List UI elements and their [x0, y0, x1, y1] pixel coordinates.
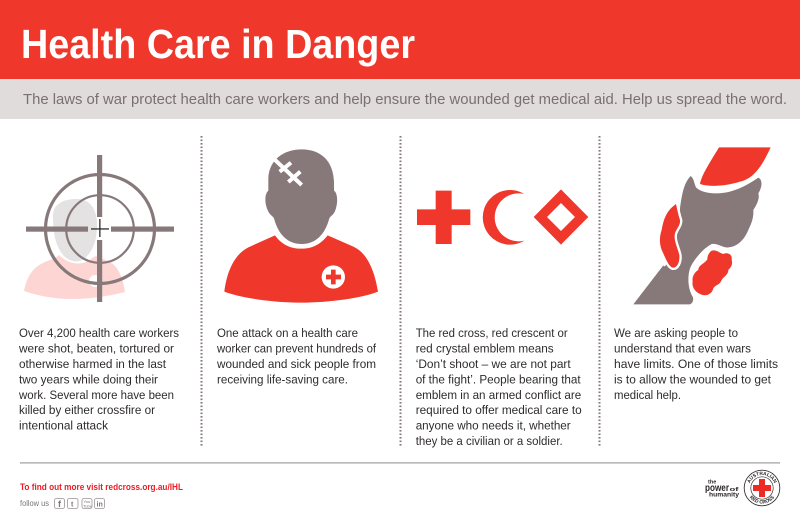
- text: protective emblems: red crystal emblem means: [416, 342, 554, 356]
- icon: red cross: [417, 191, 470, 244]
- logo: the power of humanity: of: [730, 487, 739, 493]
- icon: emblems: [417, 189, 588, 245]
- logo: Australian Red Cross: RED CROSS: [750, 495, 774, 504]
- text: attacks on workers: two years while doing their: [19, 372, 158, 386]
- text: attacks on workers: were shot, beaten, tortured or: [18, 342, 174, 356]
- panel: protective emblems: [416, 189, 588, 448]
- text: limits of war: have limits. One of those limits: [614, 357, 778, 371]
- text: protective emblems: required to offer medical care to: [416, 403, 582, 417]
- footer call to action: To find out more visit redcross.org.au/IHL: [20, 482, 183, 492]
- text: protective emblems: of the fight’. People bearing that: [416, 372, 581, 386]
- text: protective emblems: [416, 326, 582, 448]
- text: protective emblems: they be a civilian or a soldier.: [416, 434, 563, 448]
- text: impact of an attack: receiving life-saving care.: [217, 372, 348, 386]
- icon: red crescent: [483, 190, 524, 245]
- text: protective emblems: ‘Don’t shoot – we are not part: [416, 357, 571, 371]
- text: protective emblems: The red cross, red crescent or: [416, 326, 568, 340]
- social icons: You: [84, 499, 90, 504]
- logo: Australian Red Cross: AUSTRALIAN: [748, 472, 777, 484]
- social icons: f: [58, 499, 62, 509]
- text: protective emblems: anyone who needs it, whether: [416, 418, 571, 432]
- panel: limits of war: [614, 147, 778, 402]
- text: attacks on workers: otherwise harmed in the last: [19, 357, 167, 371]
- text: impact of an attack: One attack on a health care: [217, 326, 358, 340]
- icon: helping hands: [633, 147, 771, 304]
- text: attacks on workers: Over 4,200 health care workers: [19, 326, 179, 340]
- social icons: [54, 498, 104, 509]
- title: Health Care in Danger: [21, 21, 415, 67]
- header band: [0, 0, 800, 79]
- text: protective emblems: emblem in an armed conflict are: [416, 388, 581, 402]
- text: impact of an attack: wounded and sick people from: [216, 357, 376, 371]
- icon: red crystal: [534, 189, 588, 245]
- social icons: Tube: [83, 504, 93, 508]
- text: limits of war: medical help.: [614, 388, 681, 402]
- text: limits of war: [614, 326, 778, 402]
- follow us label: follow us: [20, 499, 49, 508]
- icon: faded person in crosshair: [24, 155, 174, 302]
- logo: Australian Red Cross: [744, 470, 780, 506]
- subtitle band: [0, 79, 800, 119]
- text: limits of war: We are asking people to: [614, 326, 738, 340]
- text: attacks on workers: work. Several more have been: [18, 388, 174, 402]
- logo: the power of humanity: the: [708, 480, 716, 486]
- social icons: in: [96, 502, 103, 508]
- logo: the power of humanity: humanity: [709, 492, 740, 498]
- text: limits of war: is to allow the wounded to get: [614, 372, 772, 386]
- logo: the power of humanity: power: [705, 483, 729, 494]
- subtitle text: The laws of war protect health care workers and help ensure the wounded get medical aid. Help us spread the word.: [23, 91, 787, 108]
- logo: the power of humanity: [705, 480, 740, 498]
- text: attacks on workers: [18, 326, 179, 432]
- panel: impact of an attack: [216, 149, 378, 386]
- text: impact of an attack: [216, 326, 377, 386]
- text: attacks on workers: intentional attack: [19, 418, 109, 432]
- panel: attacks on workers: [18, 155, 179, 432]
- text: limits of war: understand that even wars: [614, 342, 751, 356]
- text: attacks on workers: killed by either crossfire or: [19, 403, 155, 417]
- text: impact of an attack: worker can prevent hundreds of: [216, 342, 377, 356]
- icon: injured health worker: [224, 149, 378, 303]
- social icons: t: [71, 502, 74, 508]
